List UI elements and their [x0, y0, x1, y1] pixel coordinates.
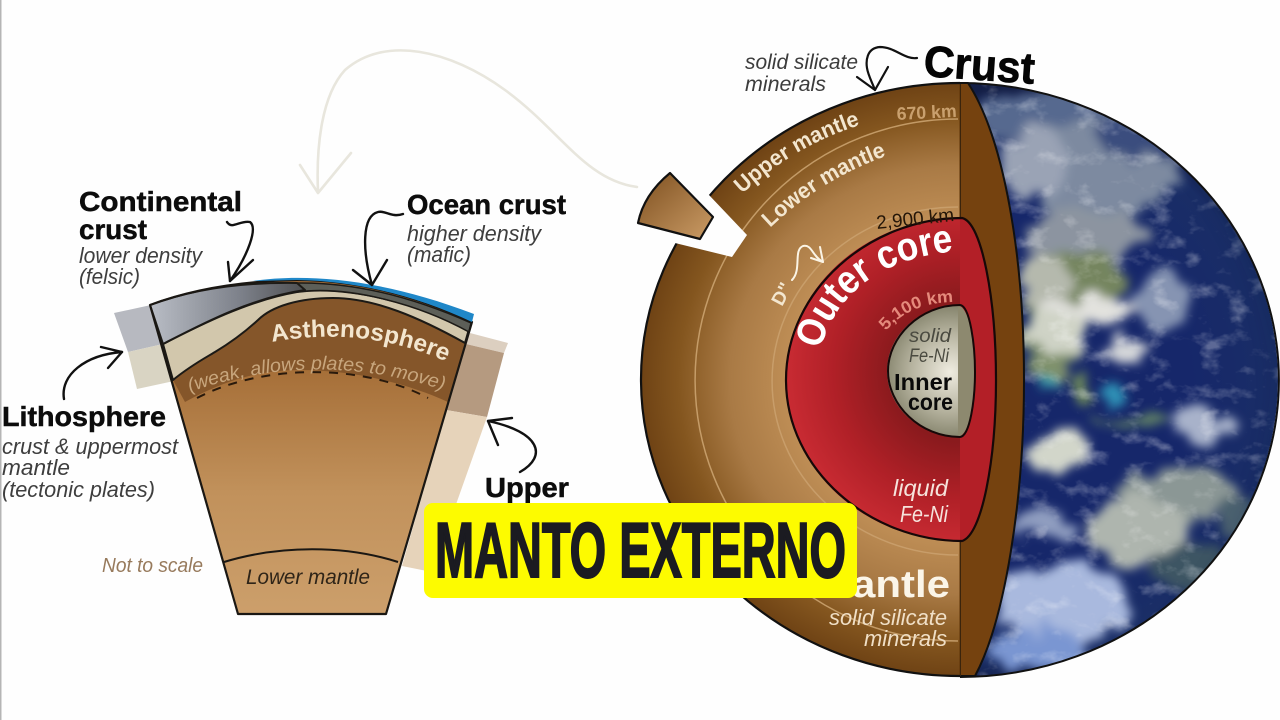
label: 2,900 km: 2,900 km	[875, 205, 955, 234]
label: upper: Upper	[485, 472, 569, 503]
clouds and continents	[975, 87, 1255, 672]
label: liquid Fe-Ni: Fe-Ni	[900, 501, 949, 527]
ocean crust dark layer	[297, 283, 471, 332]
dark limb shading	[1240, 242, 1262, 290]
label group: crust composition	[745, 51, 858, 96]
label group: crust composition: solid silicate	[745, 51, 858, 74]
arrow: crust	[857, 47, 917, 90]
label: inner core: Inner	[894, 369, 952, 395]
asthenosphere brown top	[173, 298, 465, 402]
outer core	[786, 218, 960, 541]
inner core outline	[888, 305, 975, 437]
panel: wedge cross-section	[114, 278, 508, 616]
lithospheric mantle	[163, 291, 469, 380]
outer core cut face	[960, 218, 996, 541]
cloud texture	[960, 80, 1280, 680]
label: solid Fe-Ni: solid	[909, 326, 953, 347]
label group: lithosphere: Lithosphere	[2, 401, 166, 432]
side projection: upper mantle	[402, 333, 508, 572]
inner core cut face	[958, 305, 975, 437]
wedge outline	[150, 280, 472, 614]
label group: ocean crust: (mafic)	[407, 242, 471, 267]
continental crust	[150, 283, 305, 344]
label: lower mantle: Lower mantle	[246, 566, 370, 589]
label: liquid Fe-Ni: liquid	[893, 475, 949, 501]
notch cut into mantle	[640, 165, 747, 257]
label: inner core: core	[908, 389, 953, 415]
label: lower mantle	[770, 156, 886, 228]
label: solid silicate minerals: minerals	[864, 626, 947, 651]
dashed boundary	[197, 372, 428, 398]
panel: wedge cross-section: (weak, allows plates to move)	[189, 356, 445, 395]
labels inside globe	[733, 101, 957, 651]
label: upper mantle	[742, 124, 863, 194]
heading: crust: Crust	[922, 37, 1037, 94]
label group: continental crust: Continental	[79, 186, 242, 217]
earth outline	[960, 83, 1279, 677]
label: asthenosphere	[272, 337, 447, 362]
arrow: D double prime	[792, 246, 823, 280]
label group: lithosphere: mantle	[2, 455, 70, 480]
arrow: ocean crust	[353, 212, 403, 285]
banner: manto externo: MANTO EXTERNO	[435, 506, 846, 594]
label: solid silicate minerals	[829, 605, 947, 651]
label group: continental crust	[79, 186, 242, 289]
670 km boundary	[695, 119, 958, 641]
mantle outline	[641, 83, 960, 676]
label: outer core	[820, 251, 956, 350]
lower mantle boundary	[224, 549, 398, 562]
label group: lithosphere: (tectonic plates)	[2, 477, 155, 502]
crust cut face	[960, 83, 1024, 676]
mantle cut face	[641, 83, 960, 676]
labels inside globe: Upper mantle	[733, 114, 858, 191]
label group: ocean crust: Ocean crust	[407, 189, 566, 220]
label: D double prime: D"	[768, 279, 797, 309]
detached mantle piece	[638, 173, 713, 239]
label: solid silicate minerals: solid silicate	[829, 605, 947, 630]
label group: ocean crust: higher density	[407, 221, 543, 246]
arrow: continental crust	[227, 222, 253, 281]
label: not to scale: Not to scale	[102, 555, 203, 577]
left frame edge	[0, 0, 2, 720]
label: solid Fe-Ni	[909, 326, 953, 367]
banner: manto externo	[424, 503, 857, 598]
earth surface	[960, 80, 1280, 680]
panel: earth globe	[638, 80, 1280, 680]
inner core	[887, 305, 960, 437]
label: weak layer note	[190, 369, 443, 392]
label: inner core	[894, 369, 953, 415]
label group: continental crust: crust	[79, 214, 147, 245]
outer core outline	[786, 218, 996, 541]
labels inside globe: 5,100 km	[878, 292, 952, 330]
label group: crust composition: minerals	[745, 73, 827, 96]
label group: lithosphere	[2, 401, 179, 502]
label: liquid Fe-Ni	[893, 475, 949, 527]
divider: mantle fold	[959, 84, 961, 676]
wedge body: mantle	[150, 280, 472, 614]
side projection: lithosphere	[114, 305, 174, 389]
arrow: upper mantle	[488, 418, 536, 472]
arrow: wedge moved from globe to detail	[300, 50, 637, 193]
label group: continental crust: (felsic)	[79, 264, 140, 289]
D'' boundary	[772, 207, 958, 555]
labels inside globe: Outer core	[797, 231, 952, 345]
labels inside globe: Lower mantle	[760, 146, 884, 227]
label group: lithosphere: crust & uppermost	[2, 434, 179, 459]
label: 670 km: 670 km	[896, 101, 957, 124]
label: solid Fe-Ni: Fe-Ni	[909, 346, 950, 367]
label: 5,100 km	[886, 302, 955, 331]
panel: wedge cross-section: Asthenosphere	[272, 320, 449, 360]
ocean water	[252, 278, 474, 322]
label: mantle: Mantle	[817, 564, 950, 606]
label group: ocean crust	[407, 189, 566, 267]
arrow: lithosphere	[64, 347, 122, 399]
label group: continental crust: lower density	[79, 243, 204, 268]
